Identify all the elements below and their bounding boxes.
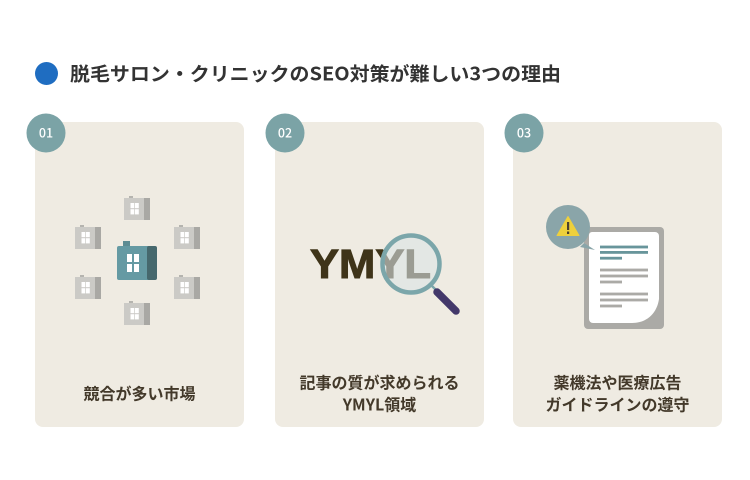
icon: YMYL under magnifier: YMYL: [310, 241, 431, 287]
panel label: ガイドラインの遵守: [545, 392, 690, 416]
panel label: 記事の質が求められる: [299, 370, 460, 394]
panel: competitive market: [26, 114, 244, 427]
icon: warning bubble: [546, 205, 595, 250]
icon: YMYL under magnifier: YMYL: [310, 241, 431, 287]
panel label: [545, 370, 690, 416]
panel: YMYL: [266, 114, 484, 427]
panel label: [299, 370, 460, 416]
panel label: 薬機法や医療広告: [553, 370, 682, 394]
title: 脱毛サロン・クリニックのSEO対策が難しい3つの理由: [70, 60, 561, 86]
badge 02: [266, 114, 304, 152]
badge 03: 03: [517, 122, 531, 142]
icon: document: [584, 227, 664, 329]
badge 01: [26, 114, 66, 152]
panel: regulations: [504, 114, 722, 427]
panel label: 競合が多い市場: [83, 380, 196, 404]
badge 01: 01: [39, 122, 53, 142]
badge 02: 02: [278, 122, 292, 142]
icon: surrounding buildings: [75, 196, 200, 325]
panel label: YMYL領域: [342, 392, 416, 416]
icon: YMYL under magnifier: [310, 236, 456, 311]
badge 03: [504, 114, 544, 152]
title marker: [35, 62, 58, 85]
